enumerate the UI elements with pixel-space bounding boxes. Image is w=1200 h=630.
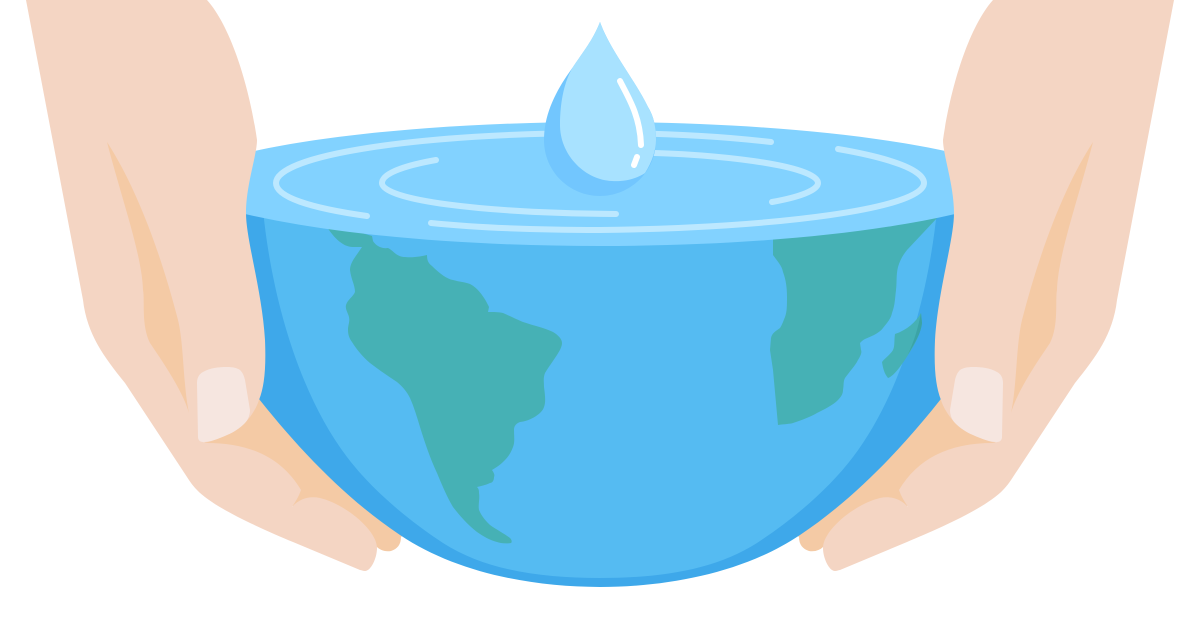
thumbnail bbox=[950, 367, 1003, 442]
water surface bbox=[240, 122, 960, 246]
shadow bbox=[1011, 142, 1093, 413]
continent: Madagascar bbox=[882, 313, 922, 378]
far palm left bbox=[203, 390, 420, 551]
ripple rings bbox=[276, 133, 924, 230]
globe hemisphere bbox=[200, 210, 1000, 587]
thumbnail bbox=[197, 367, 250, 442]
left hand bbox=[26, 0, 377, 571]
continent: Africa bbox=[770, 217, 938, 425]
water drop bbox=[544, 22, 656, 196]
right hand bbox=[823, 0, 1174, 571]
shadow bbox=[107, 142, 189, 413]
far palm right bbox=[780, 390, 997, 551]
continent: South America bbox=[324, 222, 562, 543]
